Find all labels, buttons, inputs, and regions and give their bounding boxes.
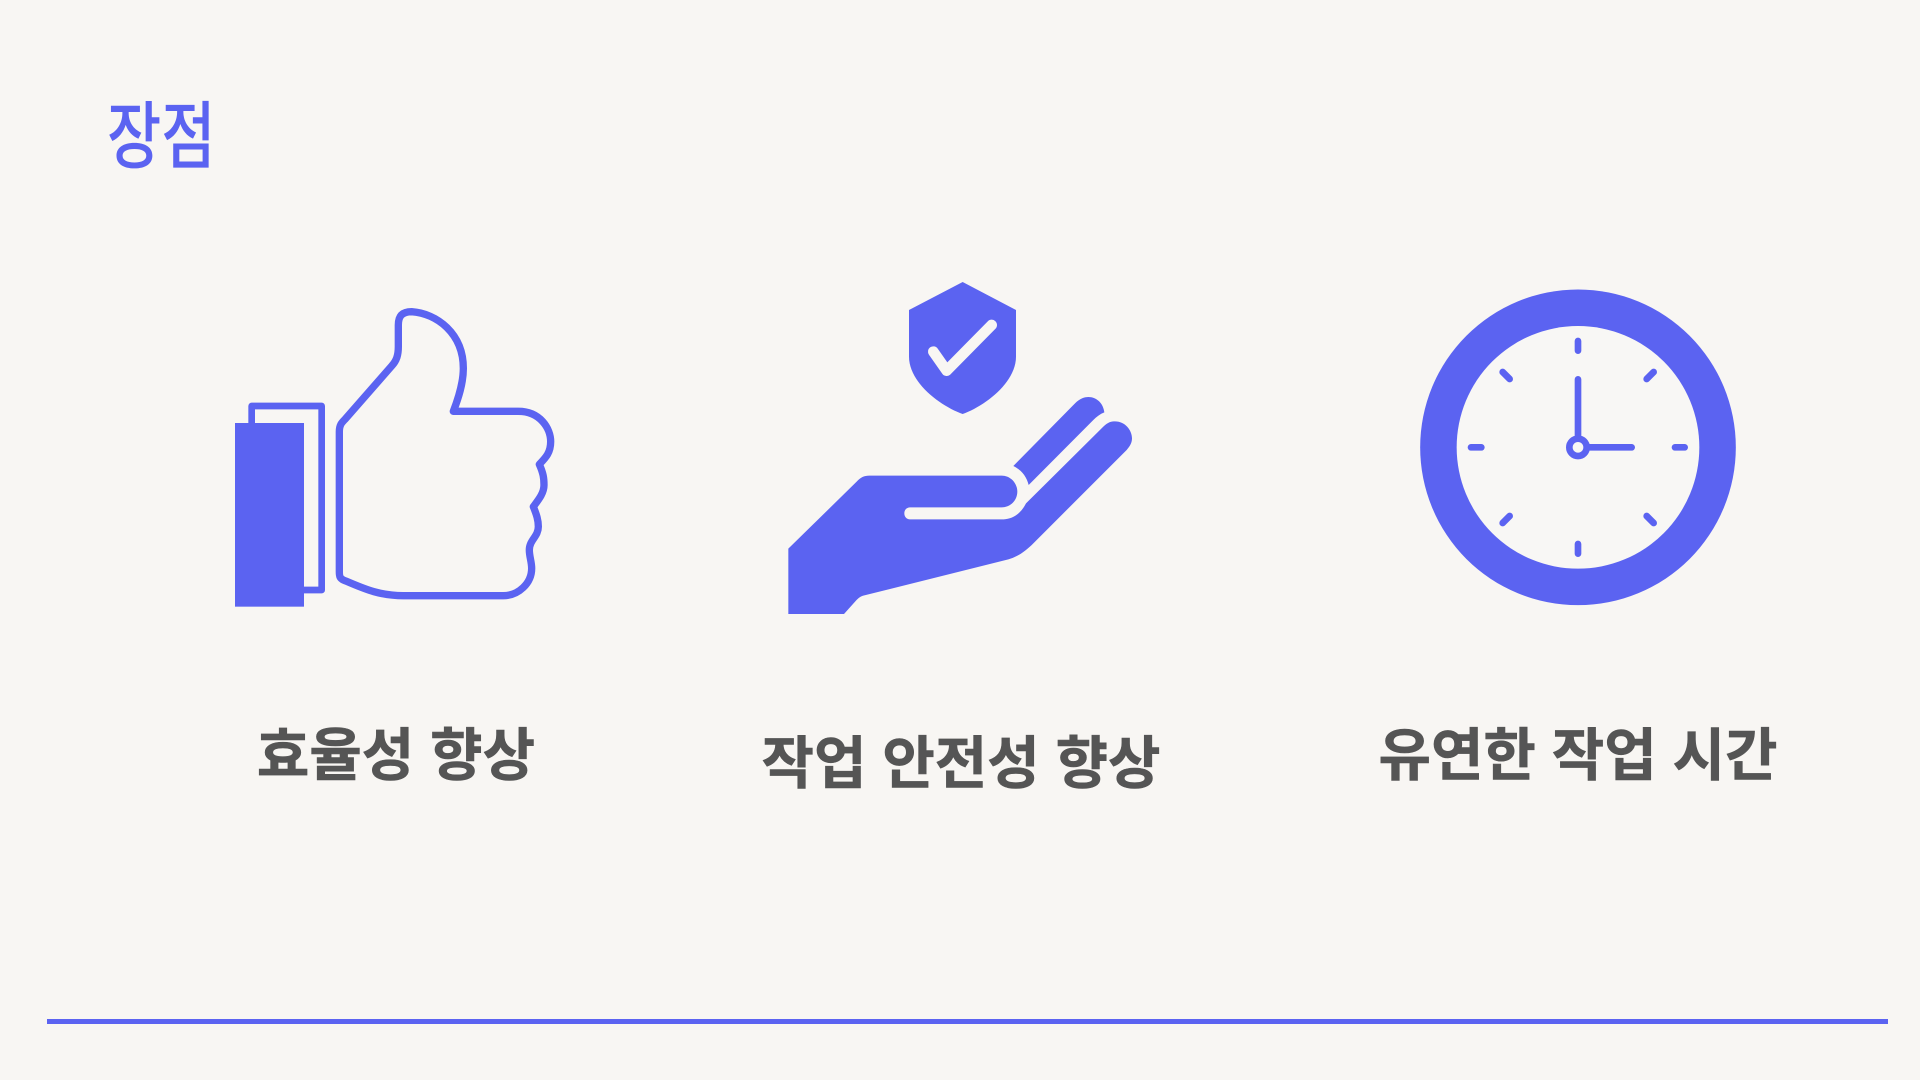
icon: hand with shield [788, 282, 1132, 614]
label: flexible hours: 유연한 작업 시간 [1378, 710, 1778, 792]
icon: thumbs up [235, 308, 554, 607]
label: efficiency: 효율성 향상 [257, 710, 535, 792]
icon: clock [1420, 290, 1736, 606]
title: 장점 [107, 78, 216, 183]
bottom rule [47, 1019, 1888, 1024]
label: work safety: 작업 안전성 향상 [762, 718, 1160, 800]
